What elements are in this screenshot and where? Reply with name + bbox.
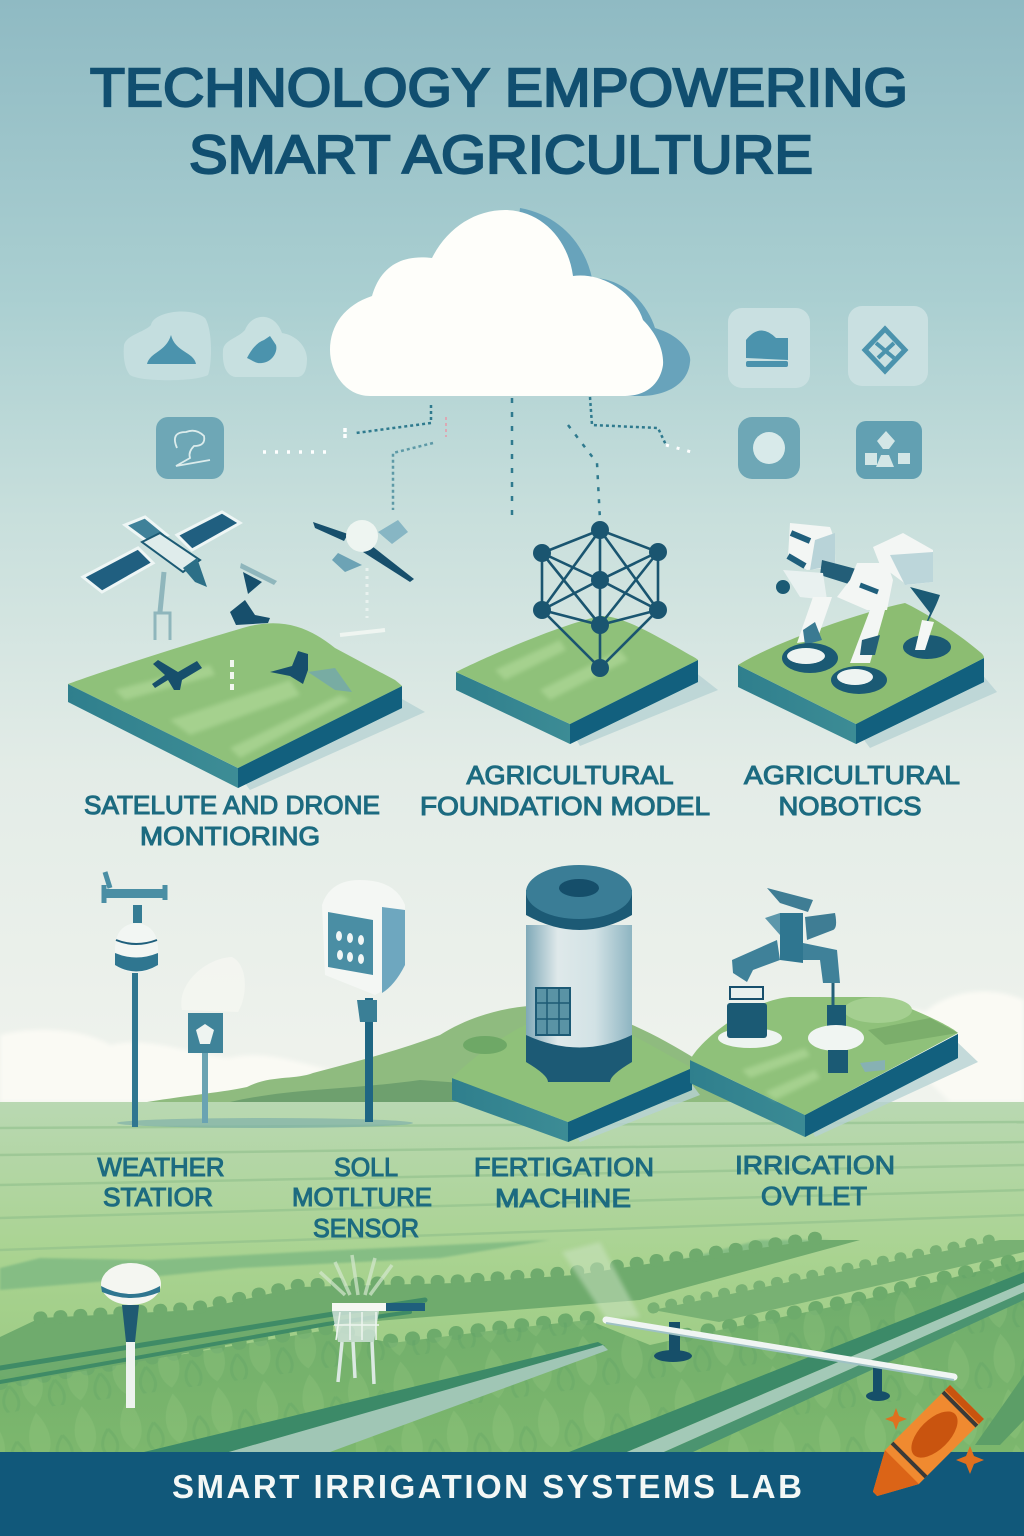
ground shadow bbox=[117, 1118, 413, 1128]
icon: crayon logo bbox=[858, 1385, 984, 1511]
tile: agricultural robotics bbox=[738, 523, 997, 748]
label: agricultural robotics: AGRICULTURAL bbox=[744, 760, 960, 790]
furrows bbox=[0, 1300, 425, 1382]
icon: diamond tile bbox=[848, 306, 928, 386]
label: fertigation machine: FERTIGATION bbox=[474, 1152, 654, 1182]
tile: irrigation outlet bbox=[690, 888, 978, 1137]
icon: circle tile bbox=[738, 417, 800, 479]
label: soil moisture sensor: SOLL bbox=[334, 1152, 398, 1182]
footer bar bbox=[0, 1452, 1024, 1536]
icon: machine tile bbox=[728, 308, 810, 388]
title bbox=[90, 58, 908, 185]
label: irrigation outlet bbox=[735, 1150, 895, 1211]
icon: chat tile bbox=[156, 417, 224, 479]
label: agricultural foundation model bbox=[420, 760, 710, 821]
label: soil moisture sensor bbox=[292, 1152, 432, 1243]
icon: nodes tile bbox=[856, 421, 922, 479]
field sensor dome bbox=[101, 1263, 161, 1408]
icon: cloud tile 2 bbox=[223, 317, 307, 377]
label: agricultural foundation model: FOUNDATION MODEL bbox=[420, 791, 710, 821]
field sprinkler line bbox=[562, 1242, 954, 1401]
icon: drones bbox=[152, 520, 414, 692]
label: agricultural robotics bbox=[744, 760, 960, 821]
icon: satellite bbox=[83, 512, 240, 640]
label: agricultural foundation model: AGRICULTURAL bbox=[466, 760, 674, 790]
label: soil moisture sensor: SENSOR bbox=[313, 1213, 419, 1243]
title: TECHNOLOGY EMPOWERING bbox=[90, 58, 908, 118]
crop mass rear bbox=[0, 1240, 860, 1390]
label: satellite and drone monitoring: SATELUTE AND DRONE bbox=[84, 790, 380, 820]
upper crop rows bbox=[0, 1240, 830, 1290]
distant clouds bbox=[0, 991, 1024, 1102]
crop mass front bbox=[0, 1260, 1024, 1452]
label: agricultural robotics: NOBOTICS bbox=[778, 791, 922, 821]
label: weather station: STATIOR bbox=[103, 1182, 213, 1212]
title: SMART AGRICULTURE bbox=[189, 125, 813, 185]
tile: satellite and drone monitoring bbox=[68, 512, 425, 790]
icon tiles bbox=[124, 306, 928, 479]
soil moisture sensor bbox=[322, 880, 405, 1122]
label: weather station: WEATHER bbox=[98, 1152, 224, 1182]
label: weather station bbox=[98, 1152, 224, 1212]
label: satellite and drone monitoring bbox=[84, 790, 380, 851]
distant hill bbox=[147, 1005, 760, 1102]
label: irrigation outlet: IRRICATION bbox=[735, 1150, 895, 1180]
icon: network cube bbox=[533, 521, 667, 677]
tile: agricultural foundation model bbox=[456, 521, 718, 746]
sky background bbox=[0, 0, 1024, 1102]
label: fertigation machine bbox=[474, 1152, 654, 1213]
farm field bbox=[0, 1102, 1024, 1452]
label: soil moisture sensor: MOTLTURE bbox=[292, 1182, 432, 1212]
central cloud bbox=[330, 208, 690, 396]
icon: cloud tile 1 bbox=[124, 312, 211, 380]
tile: fertigation machine bbox=[452, 865, 700, 1142]
label: irrigation outlet: OVTLET bbox=[761, 1181, 867, 1211]
footer bar: SMART IRRIGATION SYSTEMS LAB bbox=[172, 1468, 802, 1505]
label: satellite and drone monitoring: MONTIORING bbox=[140, 821, 320, 851]
icon: robot bbox=[776, 523, 951, 694]
data connections bbox=[263, 397, 695, 520]
label: fertigation machine: MACHINE bbox=[495, 1183, 631, 1213]
weather station bbox=[104, 872, 245, 1127]
field sprayer bbox=[320, 1255, 425, 1384]
